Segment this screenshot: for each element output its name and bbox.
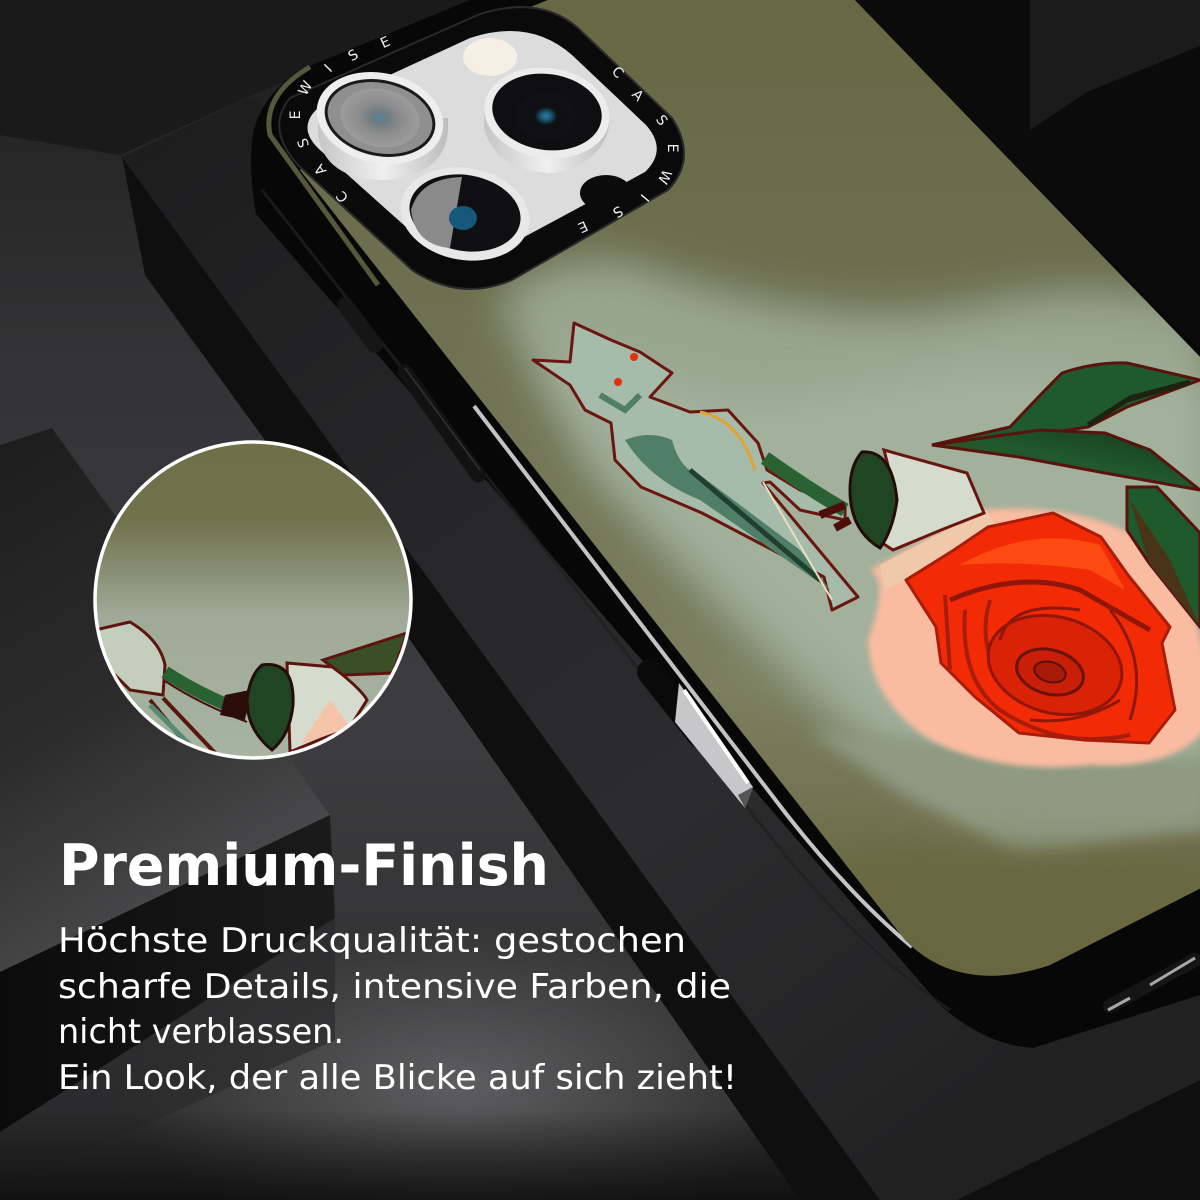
text block: description: Ein Look, der alle Blicke auf sich zieht!: [58, 1058, 737, 1098]
bumper text: CASEWISE right: S: [652, 112, 670, 129]
rose glow: [868, 509, 1200, 767]
bumper text: CASEWISE left: S: [346, 47, 361, 65]
bumper text: CASEWISE right: I: [637, 191, 652, 204]
silver edge reflection: [474, 406, 912, 947]
bumper text: CASEWISE right: C: [608, 64, 627, 82]
microphone hole: [580, 175, 632, 211]
camera flash: [463, 38, 517, 76]
text block: description: Höchste Druckqualität: gestochen: [58, 921, 686, 961]
icon: rose: [906, 513, 1175, 743]
camera island: [279, 7, 684, 289]
bumper text: CASEWISE right: [575, 64, 680, 235]
bumper text: CASEWISE left: I: [322, 62, 336, 76]
olive sliver beside camera: [269, 67, 378, 285]
bumper text: CASEWISE left: C: [333, 187, 352, 205]
phone back artwork: green painted surface: [260, 0, 1200, 990]
bumper text: CASEWISE right: W: [654, 167, 674, 186]
cat haunch: [867, 450, 984, 550]
text block: description: [58, 921, 737, 1098]
bumper text: CASEWISE left: E: [378, 34, 393, 52]
bumper text: CASEWISE left: A: [311, 161, 330, 178]
camera lens: upper right: [478, 60, 616, 173]
bumper text: CASEWISE right: E: [664, 144, 680, 152]
bumper text: CASEWISE left: S: [295, 136, 313, 150]
bumper text: CASEWISE left: W: [295, 78, 316, 98]
lower step block: [0, 428, 335, 1132]
zoom circle: artwork detail: [90, 440, 420, 760]
bumper text: CASEWISE right: S: [610, 202, 625, 220]
bumper text: CASEWISE right: A: [628, 87, 647, 105]
bumper text: CASEWISE left: [288, 34, 393, 205]
camera lens: bottom: [393, 157, 537, 271]
peach strip: [880, 510, 1000, 590]
bumper text: CASEWISE right: E: [575, 217, 590, 235]
text block: description: scharfe Details, intensive Farben, die: [58, 967, 731, 1007]
phone case: [251, 0, 1200, 1048]
heading: Premium-Finish: [59, 833, 549, 899]
icon: white cat: [533, 323, 984, 610]
bumper text: CASEWISE left: E: [288, 111, 304, 119]
text block: description: nicht verblassen.: [58, 1012, 344, 1052]
side buttons: [345, 305, 1195, 1010]
camera lens: upper left: [308, 61, 452, 180]
icon: rose leaves: [932, 363, 1200, 627]
artwork: glowing rose with cat: [533, 323, 1200, 767]
